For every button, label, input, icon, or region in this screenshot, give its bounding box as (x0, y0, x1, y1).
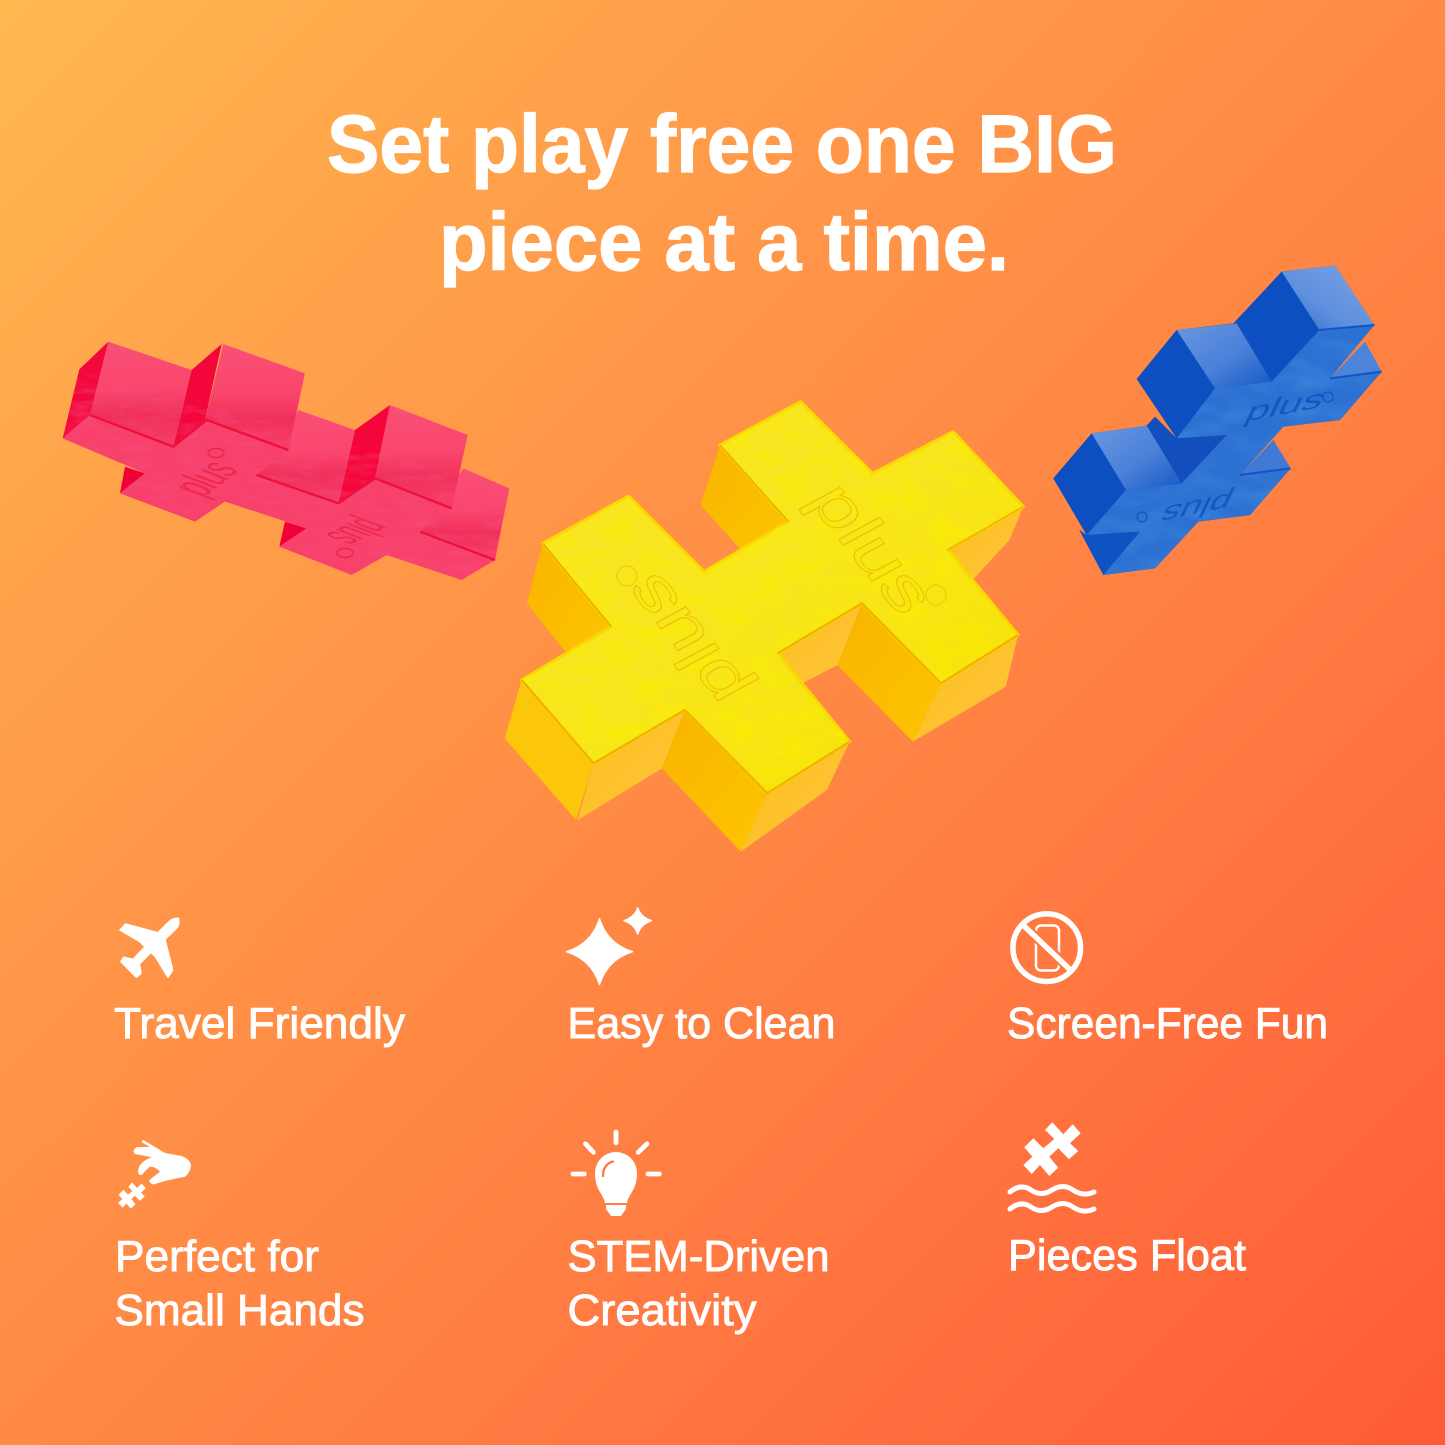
puzzle piece: red (63, 342, 509, 580)
label: Small Hands (114, 1286, 364, 1335)
registered mark (1323, 392, 1333, 402)
label: Screen-Free Fun (1007, 999, 1328, 1048)
title: Set play free one BIG (327, 99, 1117, 190)
label: Travel Friendly (114, 999, 405, 1048)
registered mark (337, 548, 353, 558)
puzzle piece: blue (1053, 266, 1382, 575)
puzzle piece: red: plus (313, 513, 404, 551)
puzzle piece: red: plus (159, 453, 250, 502)
label: Pieces Float (1008, 1231, 1246, 1280)
icon: hand with piece (119, 1140, 191, 1208)
title (327, 99, 1117, 288)
puzzle piece: yellow: plus (795, 472, 952, 625)
icon: piece on water (1010, 1122, 1094, 1211)
puzzle piece: yellow (505, 402, 1023, 852)
feature: stem-driven creativity (568, 1132, 842, 1335)
icon: light bulb (573, 1132, 659, 1216)
label: Perfect for (115, 1232, 319, 1281)
puzzle piece: yellow: plus (606, 563, 763, 716)
registered mark (617, 566, 637, 586)
icon: sparkles (566, 908, 652, 984)
registered mark (926, 585, 946, 605)
puzzle piece: blue: plus (1154, 486, 1238, 531)
feature: travel friendly (114, 918, 405, 1048)
puzzle piece: blue: plus (1240, 382, 1332, 428)
feature: perfect for small hands (114, 1140, 364, 1335)
feature: easy to clean (566, 908, 836, 1048)
label: Easy to Clean (568, 999, 836, 1048)
registered mark (1137, 512, 1147, 522)
title: piece at a time. (439, 197, 1009, 288)
registered mark (208, 448, 224, 458)
icon: no phone (1013, 914, 1080, 982)
label: STEM-Driven (568, 1232, 830, 1281)
feature: pieces float (1008, 1122, 1246, 1280)
feature: screen-free fun (1007, 914, 1328, 1048)
icon: airplane (120, 918, 179, 977)
label: Creativity (568, 1286, 756, 1335)
